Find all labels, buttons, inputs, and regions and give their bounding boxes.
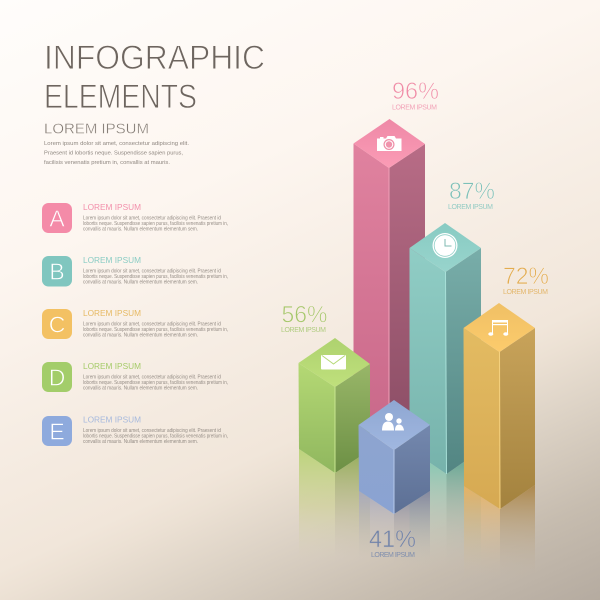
heading B: LOREM IPSUM: [83, 255, 141, 265]
value: 56%: 56%: [282, 302, 328, 328]
body B: [83, 268, 228, 286]
icon: people: [382, 413, 404, 430]
body E: lobortis neque. Suspendisse sapien purus, facilisis venenatis pretium in,: [83, 434, 228, 440]
heading C: LOREM IPSUM: [83, 308, 141, 318]
value: 96%: 96%: [392, 78, 439, 105]
body A: convallis at mauris. Nullam elementum elementum sem.: [83, 226, 198, 232]
icon: envelope: [321, 355, 346, 370]
value: 41%: LOREM IPSUM: [371, 552, 415, 559]
badge C: [42, 309, 72, 339]
badge A: A: [49, 206, 65, 232]
badge B: B: [49, 258, 65, 284]
value: 72%: LOREM IPSUM: [503, 289, 548, 296]
badge D: [42, 362, 72, 392]
bar: teal 87%: [410, 223, 481, 474]
title: ELEMENTS: [44, 78, 197, 116]
list item B: [42, 255, 228, 286]
body D: [83, 374, 228, 392]
icon: camera: [377, 136, 402, 151]
intro text block: Lorem ipsum dolor sit amet, consectetur adipiscing elit.: [44, 141, 189, 147]
bar: yellow 72%: [464, 303, 535, 509]
body A: lobortis neque. Suspendisse sapien purus, facilisis venenatis pretium in,: [83, 221, 228, 227]
title: [44, 39, 265, 116]
body C: lobortis neque. Suspendisse sapien purus, facilisis venenatis pretium in,: [83, 327, 228, 333]
badge D: D: [49, 364, 65, 390]
bar: blue 41%: [358, 400, 430, 514]
list item A: [42, 202, 228, 233]
icon: music notes: [488, 320, 508, 336]
value: 41%: 41%: [369, 526, 416, 553]
bar: green 56%: [298, 338, 370, 473]
heading A: LOREM IPSUM: [83, 202, 141, 212]
intro text block: Praesent id lobortis neque. Suspendisse sapien purus,: [44, 150, 183, 156]
list item E: [42, 414, 228, 446]
badge A: [42, 203, 72, 233]
value: 72%: 72%: [503, 263, 549, 290]
value: 96%: LOREM IPSUM: [392, 104, 437, 112]
body E: Lorem ipsum dolor sit amet, consectetur adipiscing elit. Praesent id: [83, 428, 221, 434]
body C: convallis at mauris. Nullam elementum elementum sem.: [83, 332, 198, 338]
badge E: [42, 416, 72, 446]
list item C: [42, 308, 228, 339]
body B: convallis at mauris. Nullam elementum elementum sem.: [83, 280, 198, 286]
body A: Lorem ipsum dolor sit amet, consectetur adipiscing elit. Praesent id: [83, 216, 221, 222]
intro text block: [44, 141, 189, 166]
body E: convallis at mauris. Nullam elementum elementum sem.: [83, 439, 198, 445]
body D: lobortis neque. Suspendisse sapien purus, facilisis venenatis pretium in,: [83, 380, 228, 386]
body B: Lorem ipsum dolor sit amet, consectetur adipiscing elit. Praesent id: [83, 268, 221, 274]
badge C: C: [49, 312, 65, 338]
body A: [83, 216, 228, 232]
intro text block: facilisis venenatis pretium in, convallis at mauris.: [44, 160, 170, 166]
bar: pink 96%: [354, 119, 425, 442]
list item D: [42, 361, 228, 392]
body C: [83, 322, 228, 338]
heading E: LOREM IPSUM: [83, 414, 141, 424]
icon: clock: [432, 233, 458, 258]
floor reflections: [299, 449, 535, 580]
badge E: E: [49, 418, 65, 444]
value: 56%: LOREM IPSUM: [281, 327, 326, 334]
body D: convallis at mauris. Nullam elementum elementum sem.: [83, 386, 198, 392]
value: 87%: 87%: [449, 178, 495, 205]
body D: Lorem ipsum dolor sit amet, consectetur adipiscing elit. Praesent id: [83, 374, 221, 380]
body B: lobortis neque. Suspendisse sapien purus, facilisis venenatis pretium in,: [83, 274, 228, 280]
body C: Lorem ipsum dolor sit amet, consectetur adipiscing elit. Praesent id: [83, 322, 221, 328]
body E: [83, 428, 228, 445]
badge B: [42, 256, 72, 286]
title: INFOGRAPHIC: [44, 39, 265, 77]
heading D: LOREM IPSUM: [83, 361, 141, 371]
value: 87%: LOREM IPSUM: [448, 204, 493, 211]
subtitle: LOREM IPSUM: [44, 120, 149, 138]
